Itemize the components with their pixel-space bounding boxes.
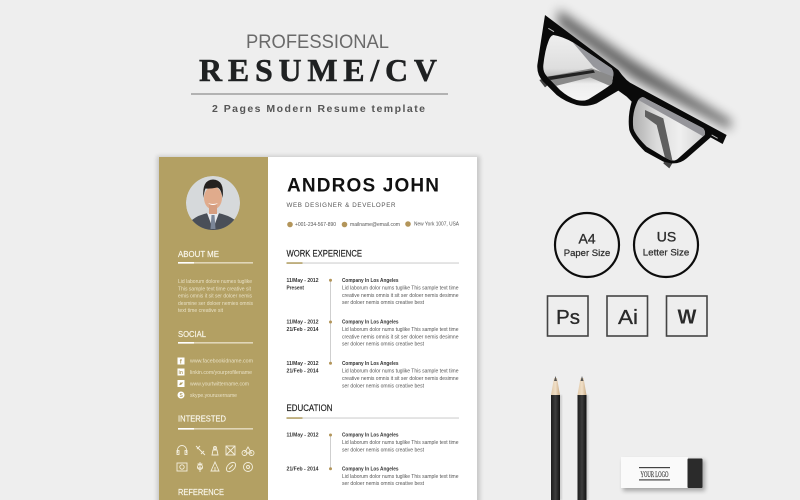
section: social: SOCIAL xyxy=(178,329,206,339)
job entry 2: 21/Feb - 2014 xyxy=(286,327,319,333)
badge: photoshop xyxy=(548,296,588,336)
section: work experience xyxy=(286,248,459,389)
job entry 3: Lid laborum dolor nums tuglike This sample text time xyxy=(342,368,459,374)
job entry 2: Company In Los Angeles xyxy=(342,320,399,326)
right lens xyxy=(632,97,706,160)
job entry 1: 11/May - 2012 xyxy=(286,278,319,284)
section: about me: ABOUT ME xyxy=(178,249,219,259)
section: about me xyxy=(178,249,253,314)
social icons and links: www.facebookidname.com xyxy=(190,358,253,364)
section: about me: text time creative sit xyxy=(178,308,224,314)
section: interested xyxy=(177,414,254,473)
heading: resume/cv: RESUME/CV xyxy=(199,52,437,88)
section: reference: REFERENCE xyxy=(178,487,224,497)
job entry 2: Lid laborum dolor nums tuglike This sample text time xyxy=(342,327,459,333)
job entry 3: creative nemis omnis it sit ser doloer nemis desimne xyxy=(342,376,459,382)
section: social xyxy=(178,329,253,399)
job entry 1 xyxy=(286,278,459,306)
badge: us letter size xyxy=(634,213,698,277)
interest icons xyxy=(177,446,254,473)
job entry 3 xyxy=(286,361,459,389)
social icons and links: in xyxy=(178,370,183,376)
left lens reflection xyxy=(572,42,614,80)
education entry 1: Company In Los Angeles xyxy=(342,433,399,439)
job title: WEB DESIGNER & DEVELOPER xyxy=(286,202,396,209)
education entry 1: Lid laborum dolor nums tuglike This sample text time xyxy=(342,440,459,446)
social icons and links xyxy=(178,358,253,399)
job entry 2: creative nemis omnis it sit ser doloer nemis desimne xyxy=(342,334,459,340)
job entry 2: ser doloer nemis omnis creative best xyxy=(342,342,425,348)
eyeglasses xyxy=(537,9,731,168)
glasses shadow xyxy=(558,9,731,129)
panel: main content xyxy=(286,176,460,487)
document page xyxy=(159,157,477,500)
contact row: +001-234-567-890 xyxy=(295,222,336,228)
resume document xyxy=(157,156,480,500)
section: about me: Lid laborum dolore numes tuglike xyxy=(178,279,252,285)
temple tips xyxy=(539,78,673,168)
social icons and links: f xyxy=(180,360,183,366)
education entry 2 xyxy=(286,466,459,487)
divider under heading xyxy=(191,94,448,95)
frame xyxy=(537,15,727,163)
section: interested: INTERESTED xyxy=(178,414,226,424)
hinge accents xyxy=(548,28,718,138)
badge: illustrator xyxy=(607,296,648,336)
section: education: EDUCATION xyxy=(286,403,332,413)
badge: word xyxy=(666,296,707,336)
profile photo xyxy=(186,176,240,232)
section: work experience: WORK EXPERIENCE xyxy=(286,248,362,258)
job entry 1: ser doloer nemis omnis creative best xyxy=(342,300,425,306)
timeline xyxy=(329,279,332,365)
document shadow xyxy=(157,156,480,500)
education entry 2: ser doloer nemis omnis creative best xyxy=(342,481,425,487)
job entry 2 xyxy=(286,320,459,348)
header: product title xyxy=(191,32,448,115)
right lens reflection xyxy=(638,96,708,137)
section: about me: emis omnis it sit ser doloer nemis xyxy=(178,294,252,300)
education entry 1 xyxy=(286,433,459,454)
name: ANDROS JOHN xyxy=(287,176,439,197)
education entry 2: 21/Feb - 2014 xyxy=(286,466,319,472)
education entry 2: Company In Los Angeles xyxy=(342,466,399,472)
job entry 3: 21/Feb - 2014 xyxy=(286,368,319,374)
pencil 2 xyxy=(578,376,588,500)
badge: word: W xyxy=(678,306,697,328)
job entry 3: Company In Los Angeles xyxy=(342,361,399,367)
social icons and links: linkin.com/yourprofilename xyxy=(190,370,252,376)
heading: professional: PROFESSIONAL xyxy=(246,32,389,53)
badge: a4 paper size: A4 xyxy=(578,230,596,246)
badge: us letter size: US xyxy=(657,228,676,244)
education timeline xyxy=(329,434,332,470)
social icons and links: skype.yourusername xyxy=(190,393,237,399)
badge: illustrator: Ai xyxy=(618,307,638,329)
badge: a4 paper size: Paper Size xyxy=(564,248,610,259)
education entry 1: 11/May - 2012 xyxy=(286,433,319,439)
education entry 2: Lid laborum dolor nums tuglike This sample text time xyxy=(342,474,459,480)
contact row: mailname@email.com xyxy=(350,222,400,228)
job entry 2: 11/May - 2012 xyxy=(286,320,319,326)
education entry 1: ser doloer nemis omnis creative best xyxy=(342,448,425,454)
job entry 3: 11/May - 2012 xyxy=(286,361,319,367)
badge: photoshop: Ps xyxy=(556,307,580,329)
job entry 1: creative nemis omnis it sit ser doloer nemis desimne xyxy=(342,293,459,299)
job entry 1: Lid laborum dolor nums tuglike This sample text time xyxy=(342,285,459,291)
section: about me: desmine ser doloer nemies omnis xyxy=(178,301,253,307)
job entry 1: Company In Los Angeles xyxy=(342,278,399,284)
contact row xyxy=(287,221,460,228)
panel: sidebar xyxy=(159,157,268,500)
badge: us letter size: Letter Size xyxy=(643,248,689,258)
contact row: New York 1007, USA xyxy=(414,222,460,228)
badge: a4 paper size xyxy=(555,213,619,277)
eraser logo: YOUR LOGO xyxy=(640,470,669,479)
section: education xyxy=(286,403,459,487)
left lens xyxy=(543,35,614,101)
eraser xyxy=(621,457,705,491)
subtitle: 2 Pages Modern Resume template xyxy=(212,103,425,115)
social icons and links: S xyxy=(180,393,184,399)
social icons and links: www.yourtwittername.com xyxy=(190,382,249,388)
pencil 1 xyxy=(551,376,562,500)
job entry 3: ser doloer nemis omnis creative best xyxy=(342,383,425,389)
section: about me: This sample text time creative sit xyxy=(178,286,252,292)
job entry 1: Present xyxy=(286,285,304,291)
